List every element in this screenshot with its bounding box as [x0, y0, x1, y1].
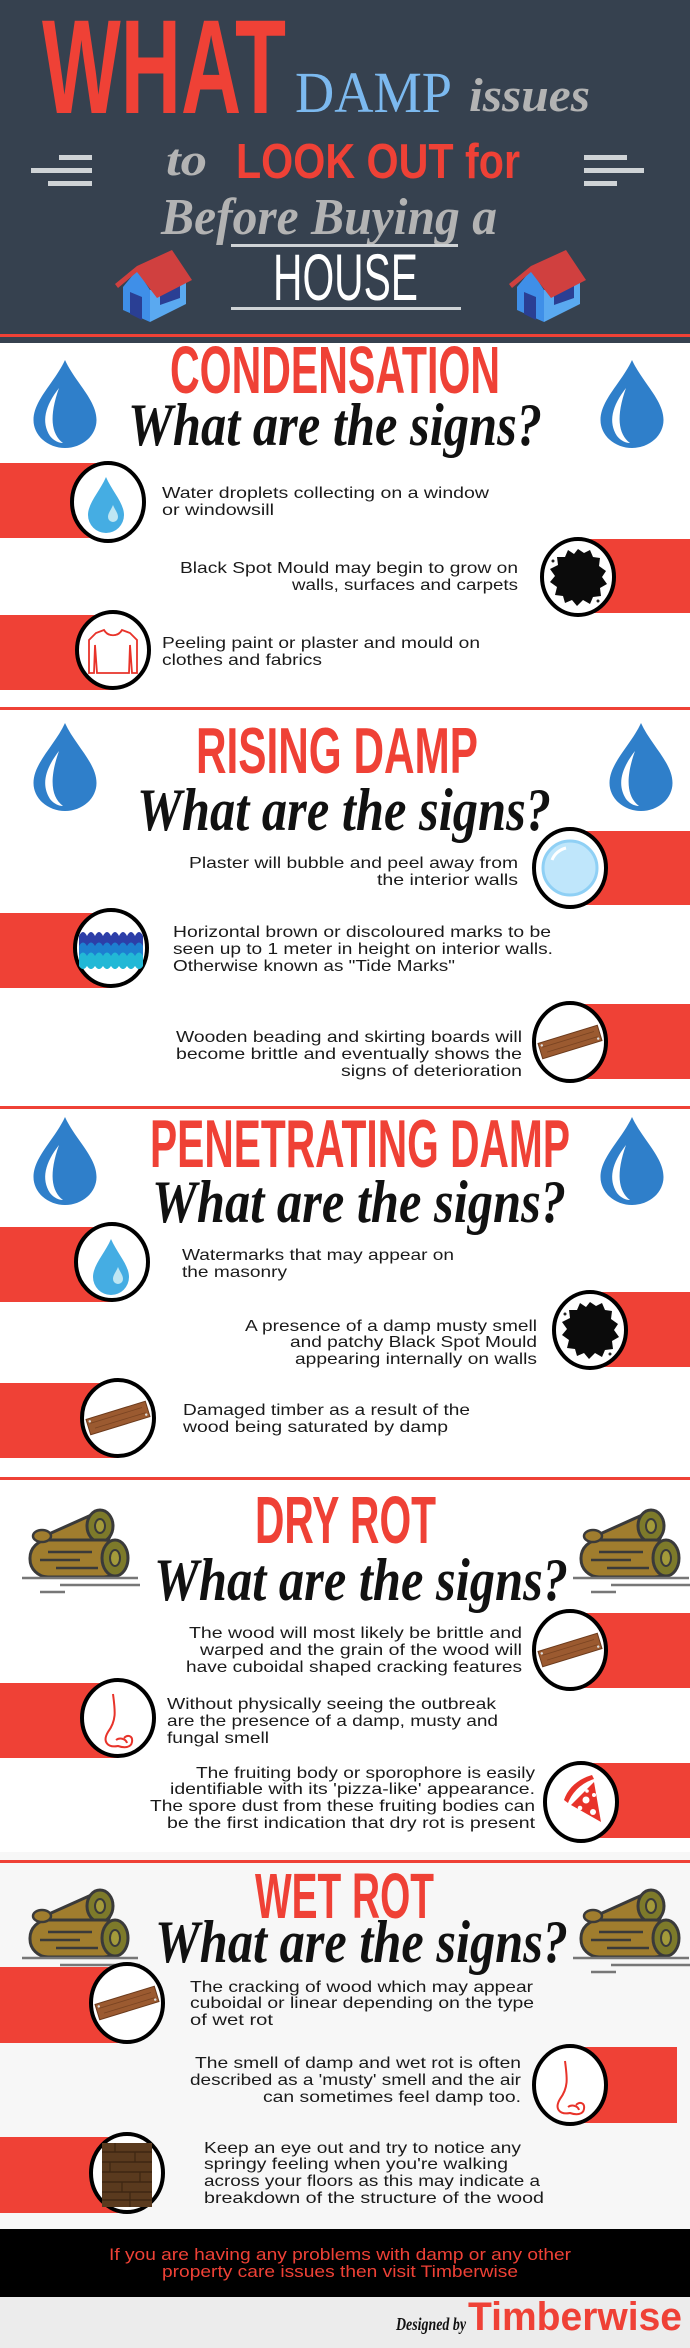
sign 3: across your floors as this may indicate a	[204, 2173, 540, 2190]
sign 2: appearing internally on walls	[295, 1351, 537, 1368]
subheading: What are the signs?	[128, 392, 542, 458]
title: Before Buying a: Before Buying a	[160, 189, 497, 246]
sign 2: Horizontal brown or discoloured marks to be	[173, 924, 551, 941]
icon: house left	[115, 250, 192, 322]
sign 2: Otherwise known as "Tide Marks"	[173, 958, 455, 975]
credit: designed by Timberwise: Designed by	[395, 2314, 467, 2334]
sign 2: Black Spot Mould may begin to grow on	[180, 560, 518, 577]
sign 2	[180, 539, 690, 615]
sign 2: and patchy Black Spot Mould	[290, 1334, 537, 1351]
sign 2: described as a 'musty' smell and the air	[190, 2072, 522, 2089]
credit: designed by Timberwise: Timberwise	[468, 2295, 682, 2339]
panel: rising damp	[0, 714, 690, 1081]
icon: drop left	[34, 723, 96, 811]
panel: condensation	[0, 333, 690, 690]
sign 2: seen up to 1 meter in height on interior walls.	[173, 941, 553, 958]
sign 1: of wet rot	[190, 2012, 274, 2029]
footer callout	[0, 2229, 690, 2297]
icon: logs left	[22, 1510, 140, 1592]
sign 1: Plaster will bubble and peel away from	[189, 855, 518, 872]
sign 3: Peeling paint or plaster and mould on	[162, 635, 480, 652]
heading: RISING DAMP: RISING DAMP	[196, 714, 478, 787]
heading: WET ROT: WET ROT	[255, 1860, 434, 1932]
sign 3: signs of deterioration	[341, 1063, 522, 1080]
subheading: What are the signs?	[152, 1169, 566, 1235]
icon: logs left	[22, 1890, 140, 1972]
icon: drop left	[34, 1117, 96, 1205]
icon: drop right	[600, 360, 664, 448]
icon: speed lines right	[584, 155, 644, 186]
sign 3: The fruiting body or sporophore is easily	[196, 1765, 535, 1782]
sign 2: Without physically seeing the outbreak	[167, 1696, 497, 1713]
sign 3: breakdown of the structure of the wood	[204, 2190, 544, 2207]
sign 1: the interior walls	[377, 872, 518, 889]
sign 2	[245, 1292, 690, 1368]
sign 1: The cracking of wood which may appear	[190, 1979, 534, 1996]
subheading: What are the signs?	[137, 777, 551, 843]
panel: wet rot	[0, 1852, 690, 2229]
panel: dry rot	[0, 1483, 690, 1841]
sign 3: wood being saturated by damp	[182, 1419, 448, 1436]
icon: drop left	[34, 360, 96, 448]
icon: logs right	[573, 1510, 690, 1592]
footer callout: If you are having any problems with damp or any other	[109, 2245, 571, 2264]
title: to: to	[166, 134, 207, 185]
sign 3: be the first indication that dry rot is present	[167, 1815, 536, 1832]
sign 1	[0, 463, 490, 541]
sign 2: can sometimes feel damp too.	[263, 2089, 521, 2106]
sign 2: walls, surfaces and carpets	[291, 577, 518, 594]
sign 3: become brittle and eventually shows the	[176, 1046, 522, 1063]
sign 3: clothes and fabrics	[162, 652, 322, 669]
sign 3: Damaged timber as a result of the	[183, 1402, 470, 1419]
title: issues: issues	[469, 69, 590, 122]
sign 2: fungal smell	[167, 1730, 269, 1747]
icon: house right	[509, 250, 586, 322]
icon: drop right	[600, 1117, 664, 1205]
footer callout: property care issues then visit Timberwise	[162, 2262, 518, 2281]
sign 2: The smell of damp and wet rot is often	[195, 2055, 521, 2072]
sign 1	[0, 1964, 534, 2043]
sign 2	[0, 910, 553, 988]
sign 1: have cuboidal shaped cracking features	[186, 1659, 522, 1676]
title: LOOK OUT for: LOOK OUT for	[236, 135, 520, 189]
sign 1	[186, 1611, 690, 1689]
sign 2: A presence of a damp musty smell	[245, 1318, 537, 1335]
sign 3	[0, 612, 480, 690]
sign 2	[0, 1680, 498, 1758]
sign 3	[0, 1380, 470, 1458]
sign 1	[0, 1224, 454, 1302]
sign 1: the masonry	[182, 1264, 287, 1281]
icon: drop right	[610, 723, 672, 811]
sign 3: identifiable with its 'pizza-like' appearance.	[170, 1781, 535, 1798]
sign 2: are the presence of a damp, musty and	[167, 1713, 498, 1730]
sign 3: Wooden beading and skirting boards will	[176, 1029, 522, 1046]
sign 1: The wood will most likely be brittle and	[189, 1625, 522, 1642]
sign 3: springy feeling when you're walking	[204, 2156, 508, 2173]
title: HOUSE: HOUSE	[273, 240, 418, 314]
heading: DRY ROT: DRY ROT	[255, 1483, 436, 1558]
sign 3: Keep an eye out and try to notice any	[204, 2140, 521, 2157]
icon: logs right	[573, 1890, 690, 1972]
credit: designed by Timberwise	[0, 2295, 690, 2348]
sign 3: The spore dust from these fruiting bodies can	[150, 1798, 535, 1815]
sign 2	[190, 2046, 677, 2124]
title: DAMP: DAMP	[295, 60, 452, 125]
subheading: What are the signs?	[154, 1547, 568, 1613]
sign 3	[150, 1763, 690, 1841]
subheading: What are the signs?	[155, 1909, 568, 1975]
sign 1: Water droplets collecting on a window	[162, 485, 490, 502]
sign 1: or windowsill	[162, 502, 274, 519]
header panel	[0, 0, 690, 343]
sign 1: warped and the grain of the wood will	[199, 1642, 522, 1659]
sign 1: Watermarks that may appear on	[182, 1247, 454, 1264]
panel: penetrating damp	[0, 1106, 690, 1458]
sign 3	[176, 1003, 690, 1081]
sign 1: cuboidal or linear depending on the type	[190, 1995, 534, 2012]
sign 1	[189, 829, 690, 907]
sign 3	[0, 2134, 544, 2213]
icon: speed lines left	[31, 155, 92, 186]
